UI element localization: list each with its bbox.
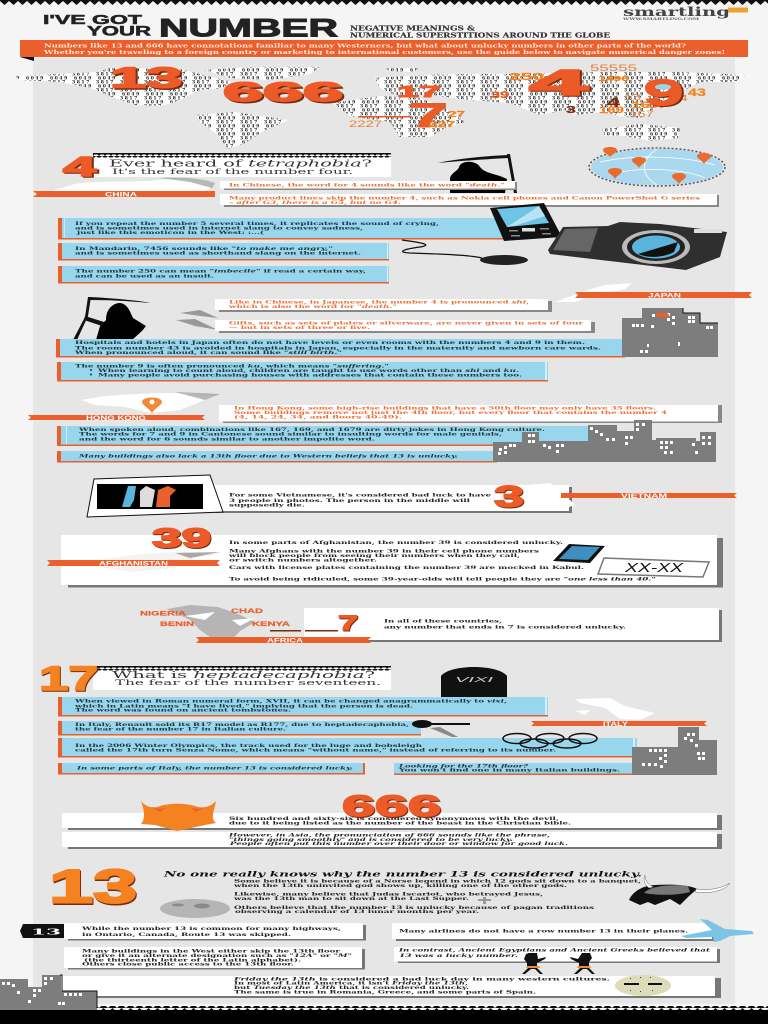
map small numbers: 43 xyxy=(688,87,706,99)
callout: airlines xyxy=(392,923,715,941)
panel: Afghanistan: or switch numbers altogether. xyxy=(229,558,378,564)
callout: Japanese death xyxy=(215,299,552,312)
map small numbers: 27 xyxy=(448,110,466,119)
callout: high-rise floors: (4, 14, 24, 34, and floors 40-49). xyxy=(234,414,403,420)
icon: airplane xyxy=(681,919,754,942)
text: theories about 13 xyxy=(232,878,642,915)
callout: airlines: Many airlines do not have a row number 13 in their planes. xyxy=(399,929,689,935)
callout: 13 lucky: In some parts of Italy, the number 13 is considered lucky. xyxy=(75,766,354,772)
text: theories about 13: Some believe it is because of a Norse legend in which 12 gods sit down to a banquet, xyxy=(234,878,642,884)
number: blanks and 7: 7 xyxy=(339,613,359,636)
ribbon: Japan: JAPAN xyxy=(648,294,681,300)
callout: Africa 7 xyxy=(304,608,722,642)
panel: Afghanistan xyxy=(61,535,723,588)
callout: highways xyxy=(64,923,366,940)
section heading: tetraphobia: 4 xyxy=(65,152,99,183)
heading: why 13 is unlucky: No one really knows why the number 13 is considered unlucky. xyxy=(162,869,643,878)
number: 666: 666 xyxy=(342,790,441,823)
callout: hospitals: When pronounced aloud, it can sound like "still birth." xyxy=(73,350,342,356)
callout: crying number 5 xyxy=(58,218,509,240)
callout: product lines xyxy=(220,194,719,207)
callout: gifts: Gifts, such as sets of plates or silverware, are never given in sets of four xyxy=(229,320,584,326)
callout: crying number 5: and is sometimes used in internet slang to convey sadness, xyxy=(75,226,364,232)
callout: Renault xyxy=(58,721,421,736)
panel: Afghanistan: will block people from seeing their numbers when they call, xyxy=(227,553,521,559)
section heading: heptadecaphobia: The fear of the number seventeen. xyxy=(115,679,381,687)
map number: large 4: 4 xyxy=(529,62,588,103)
ribbon: Vietnam: VIETNAM xyxy=(621,494,667,500)
map number: 666: 666 xyxy=(225,78,345,108)
map number: 13: 13 xyxy=(110,62,182,94)
callout: number 9: Many people avoid purchasing houses with addresses that contain these numbers too. xyxy=(98,372,523,378)
callout: 7456: In Mandarin, 7456 sounds like "to make me angry," xyxy=(75,246,333,252)
callout: dirty jokes: The words for 7 and 9 in Cantonese sound similar to insulting words for male genitals, xyxy=(79,432,503,438)
callout: Olympics: called the 17th turn Senza Nome, which means "without name," instead of referring to its number. xyxy=(75,747,557,753)
map number: 13 xyxy=(110,62,184,96)
callout: Olympics: In the 2006 Winter Olympics, the track used for the luge and bobsleigh xyxy=(75,743,423,749)
icon: globe with map pins xyxy=(589,147,725,186)
section heading: heptadecaphobia: 17 xyxy=(39,660,98,698)
callout: 250: and can be used as an insult. xyxy=(75,273,215,279)
callout: Vietnam photos: For some Vietnamese, it's considered bad luck to have xyxy=(229,493,491,499)
number: blanks and 7 xyxy=(270,612,359,636)
labels: African countries: BENIN xyxy=(160,621,194,628)
map number: large 4: 4 xyxy=(531,63,590,104)
number: blanks and 7: 7 xyxy=(338,612,358,635)
title: I'VE GOT xyxy=(43,13,143,27)
callout: hospitals: Hospitals and hotels in Japan often do not have levels or even rooms with the numbers 4 and 9 in them. xyxy=(75,340,586,346)
callout: crying number 5: just like this emoticon in the West: :...( xyxy=(75,229,264,236)
map small numbers: 250 xyxy=(509,72,545,83)
icon: cable and mouse xyxy=(402,240,528,265)
icon: tombstone VIXI xyxy=(441,667,507,697)
callout: number 9: The number 9 is often pronounced ku, which means "suffering." xyxy=(75,364,389,370)
callout: Vietnam photos xyxy=(211,485,572,513)
icon: Egyptian figures xyxy=(522,953,595,974)
callout: high-rise floors xyxy=(219,405,722,423)
number: 13 xyxy=(49,860,138,914)
icon: cross xyxy=(478,897,491,904)
callout: 250: The number 250 can mean "imbecile" if read a certain way, xyxy=(75,269,367,275)
callout: Renault: In Italy, Renault sold its R17 model as R177, due to heptadecaphobia, xyxy=(75,722,410,728)
number: 39: 39 xyxy=(153,524,212,554)
section heading: tetraphobia: Ever heard of tetraphobia ? xyxy=(109,160,372,170)
text: theories about 13: when the 13th uninvited god shows up, killing one of the other gods. xyxy=(232,883,568,889)
callout: China death: In Chinese, the word for 4 sounds like the word "death." xyxy=(229,182,505,188)
icon: hockey mask xyxy=(615,975,671,996)
callout: dirty jokes: and the word for 6 sounds similar to another impolite word. xyxy=(79,436,376,442)
icon: devil head xyxy=(141,801,216,831)
subtitle: NEGATIVE MEANINGS & xyxy=(350,26,476,32)
callout: hospitals xyxy=(56,339,625,358)
icon: cell phone xyxy=(490,203,562,241)
callout: XVII anagram: which in Latin means "I have lived," implying that the person is dead. xyxy=(73,703,414,709)
section heading: tetraphobia: 4 xyxy=(63,151,97,182)
callout: 666 devil: due to it being listed as the number of the beast in the Christian bible. xyxy=(229,820,572,826)
ribbon: Italy: ITALY xyxy=(603,722,628,728)
callout: product lines: – after G3, there is a G5, but no G4. xyxy=(229,200,402,206)
icon: car keys xyxy=(412,720,470,737)
callout: 17th floor: Looking for the 17th floor? xyxy=(397,764,529,770)
map small numbers: 1496 xyxy=(598,76,629,83)
map number: large 9: 9 xyxy=(646,73,685,114)
callout: Friday the 13th: In most of Latin America, it isn't Friday the 13th, xyxy=(234,981,469,987)
section heading: heptadecaphobia: What is heptadecaphobia ? xyxy=(112,671,375,681)
callout: Egyptians and Greeks xyxy=(394,947,720,963)
map small numbers: 39 xyxy=(491,90,509,100)
intro banner: Whether you're traveling to a foreign country or marketing to international customers, use the guide below to navigate numerical danger zones! xyxy=(43,50,725,56)
callout: buildings skip 13th floor: (the thirteenth letter of the Latin alphabet). xyxy=(84,956,302,963)
ribbon: Afghanistan: AFGHANISTAN xyxy=(99,562,168,568)
labels: African countries xyxy=(140,608,290,628)
callout: China death xyxy=(220,181,517,190)
map small numbers xyxy=(349,63,706,129)
callout: 666 in Asia: However, in Asia, the pronunciation of 666 sounds like the phrase, xyxy=(227,832,551,838)
bottom zigzag footer xyxy=(0,1006,768,1024)
number: 3: 3 xyxy=(495,482,525,514)
callout: crying number 5: If you repeat the number 5 several times, it replicates the sound of crying, xyxy=(75,221,440,227)
callout: 7456: and is sometimes used as shorthand slang on the internet. xyxy=(75,251,362,257)
panel: Afghanistan: To avoid being ridiculed, some 39-year-olds will tell people they are "one less than 40." xyxy=(229,576,656,582)
number: 39 xyxy=(152,523,212,554)
map small numbers: 4 xyxy=(607,94,620,110)
callout: 13th floor: Many buildings also lack a 13th floor due to Western beliefs that 13 is unlucky. xyxy=(77,454,459,460)
map shape: Vietnam xyxy=(529,483,575,510)
callout: Friday the 13th: but Tuesday the 13th that is considered unlucky. xyxy=(234,985,470,991)
callout: hospitals: The room number 43 is avoided in hospitals in Japan, especially in the maternity and newborn care wards. xyxy=(75,346,602,352)
callout: 666 devil xyxy=(62,813,722,830)
map number: large 9 xyxy=(644,72,685,114)
callout: Africa 7: any number that ends in 7 is considered unlucky. xyxy=(384,625,627,631)
callout: number 9: When learning to count aloud, children are taught to use words other than shi and ku. xyxy=(96,368,520,374)
callout: XVII anagram xyxy=(58,697,548,716)
icon: license plate xyxy=(598,558,709,577)
callout: 13th floor xyxy=(57,451,497,462)
callout: Friday the 13th: The same is true in Romania, Greece, and some parts of Spain. xyxy=(234,989,537,995)
ribbon: Hong Kong: HONG KONG xyxy=(86,416,147,422)
section heading: tetraphobia xyxy=(63,151,391,183)
icon: Italian building xyxy=(632,727,717,775)
ribbon: Africa xyxy=(196,637,371,645)
callout: XVII anagram: The word was found on ancient tombstones. xyxy=(75,708,292,714)
icon: grim reaper xyxy=(73,297,151,340)
callout: 13 lucky xyxy=(58,763,365,774)
title: YOUR xyxy=(87,24,151,38)
map number: 666 xyxy=(223,77,345,108)
callout: buildings skip 13th floor: Many buildings in the West either skip the 13th floor xyxy=(82,949,341,955)
icon: cell phone tablet xyxy=(553,544,605,563)
callout: Africa 7: In all of these countries, xyxy=(384,619,503,625)
ribbon: Vietnam xyxy=(561,493,737,500)
icon: route 13 shield: 13 xyxy=(31,926,62,936)
ribbon: Italy xyxy=(531,721,707,728)
ribbon: Africa: AFRICA xyxy=(267,639,304,645)
ribbon: Hong Kong xyxy=(28,415,205,422)
map small numbers: 13 xyxy=(624,93,642,102)
callout: gifts: — but in sets of three or five. xyxy=(229,325,371,331)
callout: Egyptians and Greeks: In contrast, Ancient Egyptians and Ancient Greeks believed that xyxy=(397,948,712,954)
section heading: heptadecaphobia xyxy=(39,660,391,699)
callout: Olympics xyxy=(58,738,637,758)
labels: African countries: CHAD xyxy=(231,608,264,615)
number: 3: 3 xyxy=(494,480,524,514)
callout: dirty jokes: When spoken aloud, combinations like 167, 169, and 1679 are dirty jokes in Hong Kong culture. xyxy=(77,427,546,433)
callout: high-rise floors: Some buildings remove not just the 4th floor, but every floor that contains the number 4 xyxy=(234,410,669,416)
map small numbers: 1697 xyxy=(632,100,667,110)
subtitle: NUMERICAL SUPERSTITIONS AROUND THE GLOBE xyxy=(350,32,611,40)
map shape: Japan xyxy=(555,283,632,302)
callout: 666 in Asia xyxy=(62,832,722,849)
number: 666 xyxy=(342,790,442,824)
map small numbers: 2227 xyxy=(349,119,382,129)
map shape: China with Hong Kong pin xyxy=(81,392,220,413)
callout: 7456 xyxy=(58,243,389,260)
map number: large 4 xyxy=(529,62,590,104)
icon: Japanese building xyxy=(622,308,718,357)
number: 13: 13 xyxy=(50,861,138,914)
icon: Olympic rings xyxy=(503,734,597,748)
icon: license plate: XX-XX xyxy=(624,560,685,575)
panel: Afghanistan: Many Afghans with the number 39 in their cell phone numbers xyxy=(229,548,540,554)
ribbon: China xyxy=(33,191,215,198)
callout: 17th floor xyxy=(394,763,632,775)
intro banner xyxy=(20,40,748,61)
title xyxy=(43,13,338,42)
callout: 250 xyxy=(58,266,389,284)
callout: Renault: the fear of the number 17 in Italian culture. xyxy=(75,727,287,733)
callout: 666 in Asia: "things going smoothly" and is considered to be very lucky. xyxy=(229,837,514,843)
text: theories about 13: Likewise, many believe that Judas Iscariot, who betrayed Jesus, xyxy=(234,892,544,898)
callout: Japanese death: Like in Chinese, in Japanese, the number 4 is pronounced shi, xyxy=(229,300,530,306)
callout: Vietnam photos: 3 people in photos. The person in the middle will xyxy=(229,498,470,504)
map number: 7 with blank line xyxy=(358,97,448,135)
map small numbers: 4 xyxy=(679,94,689,103)
number: 13: 13 xyxy=(49,860,137,912)
callout: buildings skip 13th floor xyxy=(64,947,365,970)
map number: 7 with blank line: 7 xyxy=(409,97,448,135)
callout: high-rise floors: In Hong Kong, some high-rise buildings that have a 50th floor may only have 35 floors. xyxy=(234,406,657,412)
intro banner: Numbers like 13 and 666 have connotations familiar to many Westerners, but what about unlucky numbers in other parts of the world? xyxy=(44,44,687,50)
title: NUMBER xyxy=(159,14,338,42)
map shape: Italy xyxy=(575,698,655,720)
subtitle xyxy=(350,26,611,40)
icon: camera xyxy=(548,222,727,270)
icon: Hong Kong skyline xyxy=(493,420,716,462)
callout: Friday the 13th xyxy=(59,976,721,998)
labels: African countries: KENYA xyxy=(252,621,290,628)
icon: grim reaper xyxy=(438,154,517,193)
callout: Vietnam photos: supposedly die. xyxy=(229,503,306,509)
top zigzag edge xyxy=(0,0,768,5)
text: theories about 13: observing a calendar of 13 lunar months per year. xyxy=(235,909,480,915)
callout: XVII anagram: When viewed in Roman numeral form, XVII, it can be changed anagrammatically to vixi, xyxy=(73,699,508,705)
map small numbers: 169 xyxy=(599,105,624,115)
callout: buildings skip 13th floor: or give it an alternate designation such as "12A" or "M" xyxy=(82,953,352,959)
number: 39: 39 xyxy=(152,523,211,553)
callout: Japanese death: which is also the word for "death." xyxy=(227,304,397,310)
icon: tombstone VIXI: VIXI xyxy=(455,677,493,684)
map small numbers: 227 xyxy=(429,120,456,129)
callout: highways: in Ontario, Canada, Route 13 was skipped. xyxy=(82,932,292,938)
ribbon: Japan xyxy=(575,292,752,300)
callout: Egyptians and Greeks: 13 was a lucky number. xyxy=(399,953,519,959)
callout: 666 devil: Six hundred and sixty-six is considered synonymous with the devil, xyxy=(229,816,560,822)
icon: bottom-left skyline xyxy=(0,975,97,1010)
map shape: China xyxy=(49,178,215,197)
callout: Friday the 13th: Friday the 13th is considered a bad luck day in many western cultures. xyxy=(232,976,611,982)
logo: smartling: WWW.SMARTLING.COM xyxy=(621,17,699,21)
map small numbers: 167 xyxy=(629,109,654,119)
map shape: Afghanistan xyxy=(98,552,220,572)
ribbon: China: CHINA xyxy=(105,192,138,198)
map number: 13: 13 xyxy=(112,64,184,96)
text: theories about 13: was the 13th man to sit down at the Last Supper. xyxy=(232,896,470,902)
icon: photo frame with three people xyxy=(87,475,223,517)
world map of digits xyxy=(15,67,745,149)
map shape: Africa xyxy=(167,605,255,640)
callout: highways: While the number 13 is common for many highways, xyxy=(80,926,342,932)
number: 3 xyxy=(494,480,525,514)
callout: gifts xyxy=(215,320,595,333)
map small numbers: 55555 xyxy=(590,63,637,73)
callout: dirty jokes xyxy=(57,426,588,446)
map small numbers: 3 xyxy=(566,105,577,116)
callout: number 9 xyxy=(57,362,548,382)
callout: 666 in Asia: People often put this number over their door or window for good luck. xyxy=(228,841,569,847)
labels: African countries: NIGERIA xyxy=(140,610,187,618)
callout: 17th floor: You won't find one in many Italian buildings. xyxy=(397,768,621,774)
map number: large 9: 9 xyxy=(644,72,683,113)
section heading: tetraphobia: It's the fear of the number four. xyxy=(112,167,353,176)
logo: smartling xyxy=(621,5,748,21)
ribbon: Afghanistan xyxy=(47,560,220,568)
panel: Afghanistan: In some parts of Afghanistan, the number 39 is considered unlucky. xyxy=(229,540,564,546)
icon: Norse bull xyxy=(629,875,730,905)
icon: route 13 shield xyxy=(20,924,73,938)
callout: buildings skip 13th floor: Others close public access to the 13th floor. xyxy=(82,962,295,968)
number: 666: 666 xyxy=(343,791,442,824)
map number: 666: 666 xyxy=(223,77,343,107)
icon: chopsticks and fan xyxy=(176,310,218,330)
icon: moon xyxy=(160,899,230,918)
callout: product lines: Many product lines skip the number 4, such as Nokia cell phones and Canon PowerShot G series xyxy=(229,196,701,202)
logo: smartling: smartling xyxy=(623,5,731,19)
text: theories about 13: Others believe that the number 13 is unlucky because of pagan traditions xyxy=(234,905,595,911)
map number: 17: 17 xyxy=(397,84,441,101)
panel: Afghanistan: Cars with license plates containing the number 39 are mocked in Kabul. xyxy=(229,565,585,571)
section heading: heptadecaphobia: 17 xyxy=(40,661,99,699)
